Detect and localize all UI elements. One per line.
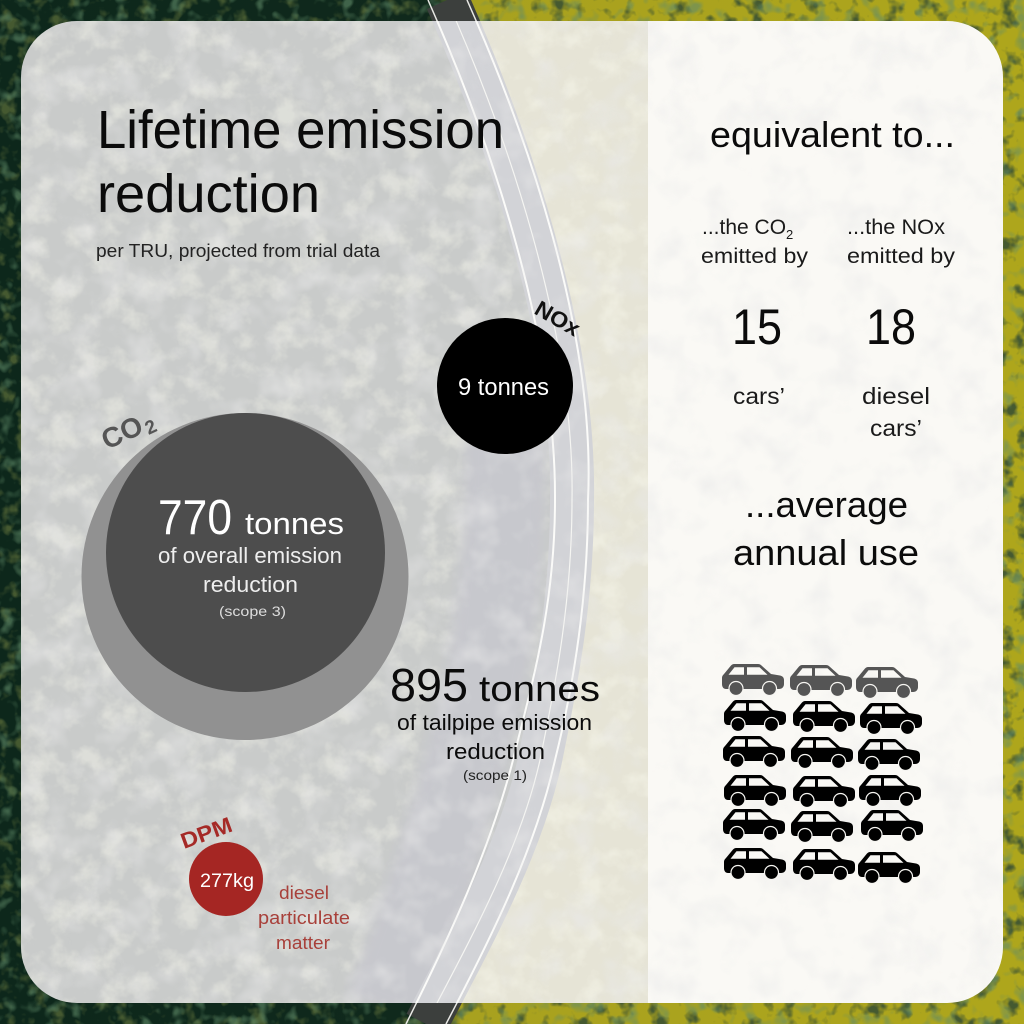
right panel shadows [648, 21, 1003, 1003]
subtitle: per TRU, projected from trial data [96, 241, 381, 261]
title: Lifetime emission [97, 100, 504, 160]
heading: equivalent to: equivalent to... [710, 114, 955, 155]
average annual use text: ...average [745, 484, 908, 525]
grey cars row [722, 664, 918, 699]
average annual use text [733, 484, 919, 573]
title [97, 100, 504, 224]
black cars rows [723, 700, 923, 884]
overall reduction figures: tonnes [245, 506, 344, 541]
car pictogram grid [722, 664, 923, 884]
DPM bubble [177, 812, 350, 953]
column: NOx equivalent: 18 [866, 299, 916, 355]
DPM description [258, 883, 350, 953]
average annual use text: annual use [733, 532, 919, 573]
overall reduction figures [158, 491, 344, 619]
column: CO2 equivalent: 2 [786, 227, 793, 242]
forest right of road [462, 21, 648, 1003]
column: CO2 equivalent: 15 [732, 299, 782, 355]
forest texture [21, 21, 648, 1003]
DPM description: particulate [258, 908, 350, 928]
road [406, 0, 589, 1024]
inner circle: overall [106, 413, 385, 692]
overall reduction figures: 770 [158, 491, 232, 545]
overall reduction figures: of overall emission [158, 543, 342, 568]
column: NOx equivalent: diesel [862, 383, 930, 409]
NOx bubble: 9 tonnes [458, 374, 549, 401]
right panel tint [648, 21, 1003, 1003]
column: NOx equivalent: ...the NOx [847, 216, 946, 239]
left panel tint [21, 21, 550, 1003]
tailpipe reduction text: 895 [390, 659, 468, 711]
tailpipe reduction text: (scope 1) [463, 767, 527, 783]
column: NOx equivalent: cars’ [870, 415, 922, 441]
overall reduction figures: reduction [203, 572, 298, 597]
column: CO2 equivalent [701, 216, 809, 409]
DPM description: diesel [279, 883, 329, 903]
tailpipe reduction text: reduction [446, 739, 545, 764]
column: NOx equivalent: emitted by [847, 245, 956, 268]
CO2 label: CO [96, 410, 148, 455]
tailpipe reduction text: tonnes [479, 668, 600, 709]
tailpipe reduction text [390, 659, 600, 783]
outer circle: tailpipe [82, 413, 408, 740]
DPM label: DPM [177, 812, 236, 854]
NOx bubble [437, 296, 585, 454]
shaded ground beside road [385, 440, 505, 1010]
column: NOx equivalent [847, 216, 956, 441]
CO2 label: 2 [142, 416, 160, 440]
CO2 bubbles [82, 404, 408, 740]
column: CO2 equivalent: emitted by [701, 245, 809, 268]
title: reduction [97, 164, 320, 224]
NOx label: NOx [530, 296, 585, 342]
column: CO2 equivalent: ...the CO [702, 216, 786, 239]
DPM description: matter [276, 933, 330, 953]
tailpipe reduction text: of tailpipe emission [397, 710, 592, 735]
column: CO2 equivalent: cars’ [733, 383, 785, 409]
DPM bubble: 277kg [200, 871, 254, 892]
overall reduction figures: (scope 3) [219, 603, 286, 619]
